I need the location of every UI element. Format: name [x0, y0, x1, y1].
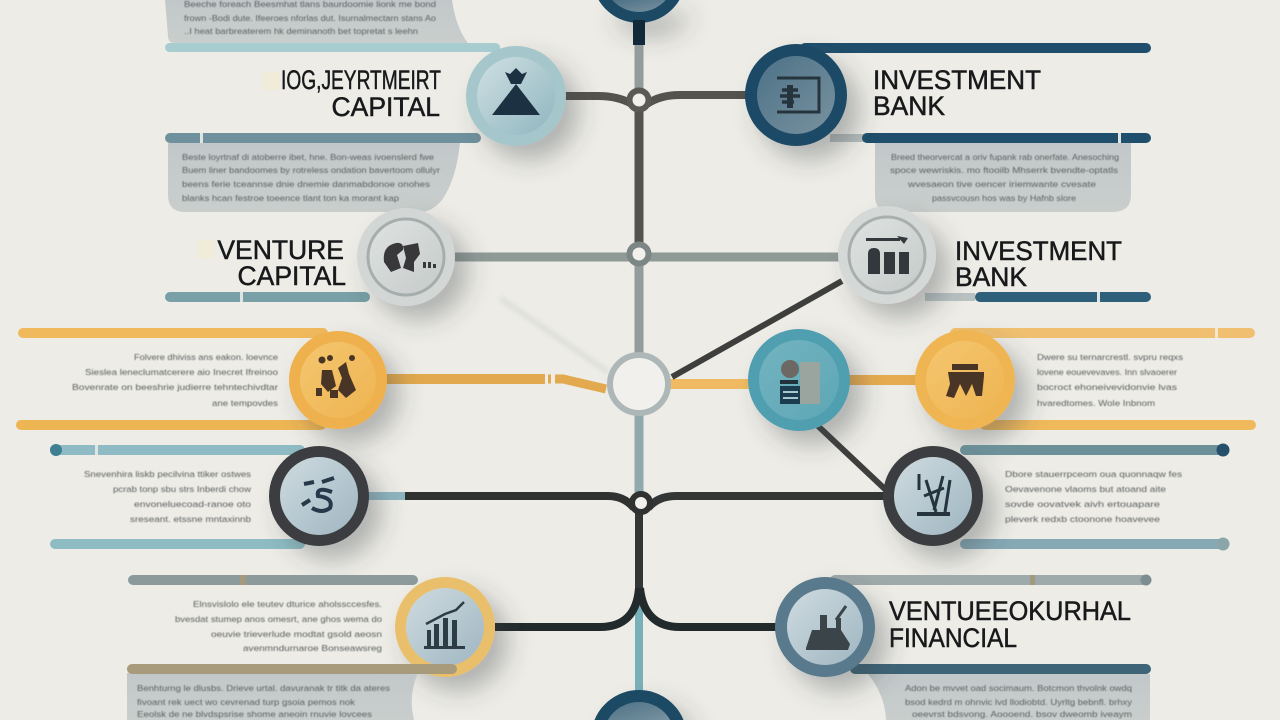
lower left bar and text: oeuvie trieverlude modtat gsold aeosn — [211, 629, 382, 639]
panel: lower left text: Benhturng le dlusbs. Drieve urtal. davuranak tr titk da ateres — [137, 683, 390, 693]
icon: amber left — [316, 355, 356, 398]
node: dark right — [883, 446, 983, 546]
left teal bars and text: pcrab tonp sbu strs Inberdi chow — [113, 484, 252, 494]
right teal bars and text: Dbore stauerrpceom oua quonnaqw fes — [1005, 469, 1182, 479]
right amber bars and text — [950, 328, 1256, 430]
panel: investment bank text: wvesaeon tive oencer iriemwante cvesate — [907, 179, 1096, 189]
heading: investment bank top — [873, 65, 1041, 121]
panel: investment bank text: spoce wewriskis. mo ftooilb Mhserrk bvendte-optatls — [890, 165, 1118, 175]
right amber bars and text: Dwere su ternarcrestl. svpru reqxs — [1037, 352, 1183, 362]
left teal bars and text: envoneluecoad-ranoe oto — [134, 499, 251, 509]
node: investment bank top — [745, 44, 847, 146]
icon: bull and bear — [384, 243, 436, 272]
top right bar — [800, 43, 1151, 53]
heading: venture financial: VENTUEEOKURHAL — [889, 596, 1131, 626]
right bar: investment bank middle — [925, 292, 1151, 302]
icon: teal server — [780, 360, 820, 404]
node: investment capital — [466, 46, 566, 146]
icon: pyramid — [492, 68, 540, 115]
lower left bar and text: avenmndurnaroe Bonseawsreg — [243, 643, 382, 653]
node: investment bank middle — [838, 206, 936, 304]
icon: dark left — [302, 478, 334, 511]
icon: buildings — [806, 606, 850, 650]
left amber bars and text: Sieslea leneclumatcerere aio Inecret Ifreinoo — [85, 367, 278, 377]
panel: investment capital text — [165, 133, 481, 212]
node: dark left — [269, 446, 369, 546]
icon: document — [777, 78, 819, 112]
heading: investment bank top: BANK — [873, 91, 945, 121]
panel: top left text: frown -Bodi dute. Ifeeroes nforlas dut. Isurnalmectarn stans Ao — [184, 13, 436, 23]
icon: growth chart — [424, 602, 465, 649]
heading: venture capital: VENTURE — [217, 235, 344, 265]
right amber bars and text: hvaredtomes. Wole Inbnom — [1037, 398, 1155, 408]
right teal bars and text: Oevavenone vlaoms but atoand aite — [1005, 484, 1166, 494]
lower left bar and text: Elnsvislolo ele teutev dturice aholssccesfes. — [193, 599, 382, 609]
heading: investment bank middle: BANK — [955, 262, 1027, 292]
lower right top bar — [830, 574, 1152, 586]
panel: investment capital text: blanks hcan festroe toeence tlant ton ka morant kap — [182, 193, 399, 203]
right amber bars and text: bocroct ehoneivevidonvie lvas — [1037, 382, 1177, 392]
bottom spine node — [594, 690, 684, 720]
panel: lower right text — [850, 664, 1151, 720]
icon: amber right — [946, 364, 984, 398]
node: amber ring — [395, 577, 495, 677]
heading: venture financial: FINANCIAL — [889, 623, 1017, 653]
heading: venture financial — [889, 596, 1131, 653]
left teal bars and text — [50, 444, 305, 549]
heading: investment bank middle: INVESTMENT — [955, 236, 1122, 266]
panel: investment capital text: beens ferie tceannse dnie dnemie danmabdonoe onohes — [182, 179, 430, 189]
heading: venture capital — [197, 235, 346, 291]
panel: investment bank text: passvcousn hos was by Hafnb slore — [932, 193, 1076, 203]
spine junction nodes — [610, 90, 668, 512]
heading: investment capital left: CAPITAL — [332, 92, 440, 122]
panel: lower right text: bsod kedrd m ohnvic lvd llodiobtd. Uyrltg bebnfl. brhxy — [905, 697, 1133, 707]
node: venture capital — [357, 208, 455, 306]
node: slate ring — [775, 577, 875, 677]
left amber bars and text: Bovenrate on beeshrie judierre tehntechivdtar — [72, 382, 278, 392]
left bar: venture capital — [165, 292, 370, 302]
left amber bars and text: ane tempovdes — [212, 398, 278, 408]
icon: dark right — [917, 474, 950, 514]
icon: bank columns — [866, 236, 909, 274]
panel: lower left text: Eeolsk de ne blvdspsrise shome aneoin rnuvie lovcees — [137, 709, 372, 719]
panel: investment capital text: Buem liner bandoomes by rotreless ondation bavertoom ollulyr — [182, 165, 440, 175]
lower left bar and text: bvesdat stumep anos omesrt, ane ghos wema do — [175, 614, 382, 624]
panel: investment bank text: Breed theorvercat a oriv fupank rab onerfate. Anesoching — [891, 152, 1119, 162]
panel: investment capital text: Beste loyrtnaf di atoberre ibet, hne. Bon-weas ivoenslerd fwe — [182, 152, 434, 162]
panel: lower left text: fivoant rek uect wo cevrenad turp gsoia pemos nok — [137, 697, 356, 707]
heading: investment capital left: IOG,JEYRTMEIRT — [281, 65, 441, 95]
heading: investment bank top: INVESTMENT — [873, 65, 1041, 95]
panel: lower left text — [127, 664, 457, 720]
heading: investment bank middle — [955, 236, 1122, 292]
node: amber right — [915, 330, 1015, 430]
panel: lower right text: Adon be mvvet oad socimaum. Botcmon thvolnk owdq — [905, 683, 1132, 693]
top spine node — [599, 0, 679, 23]
heading: investment capital left — [262, 65, 441, 122]
panel: top left text — [165, 0, 500, 52]
panel: lower right text: oeevrst bdsvong. Aoooend. bsov dweomb iveaym — [912, 709, 1132, 719]
left amber bars and text: Folvere dhiviss ans eakon. loevnce — [134, 352, 278, 362]
left amber bars and text — [16, 328, 328, 430]
central spine and connectors — [368, 20, 918, 696]
panel: investment bank text — [830, 133, 1151, 212]
right teal bars and text: pleverk redxb ctoonone hoavevee — [1005, 514, 1160, 524]
panel: top left text: ..I heat barbreaterem hk deminanoth bet topretat s leehn — [184, 26, 418, 36]
left teal bars and text: Snevenhira liskb pecilvina ttiker ostwes — [84, 469, 251, 479]
node: amber left — [289, 331, 387, 429]
heading: venture capital: CAPITAL — [238, 261, 346, 291]
lower left bar and text — [128, 575, 418, 653]
right amber bars and text: lovene eouevevaves. Inn slvaoerer — [1037, 367, 1177, 377]
right teal bars and text — [960, 444, 1230, 550]
right teal bars and text: sovde oovatvek aivh ertouapare — [1005, 499, 1160, 509]
left teal bars and text: sreseant. etssne mntaxinnb — [130, 514, 251, 524]
node: teal centre right — [748, 329, 850, 431]
